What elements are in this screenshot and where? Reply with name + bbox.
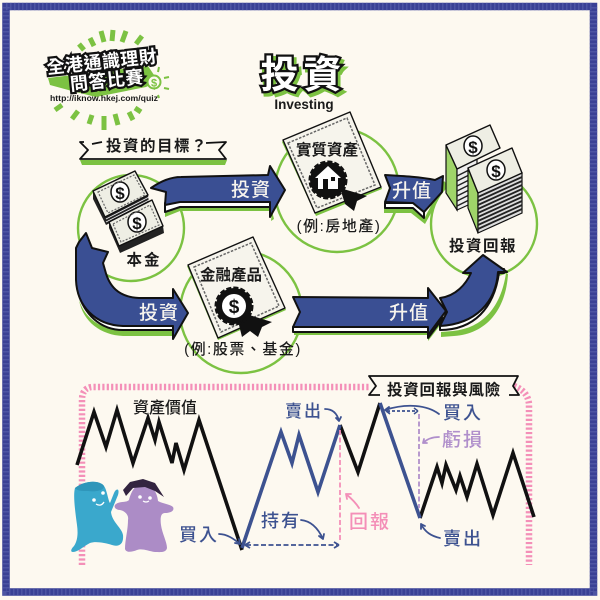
title: 投資 (263, 58, 349, 100)
stack front: $ (491, 162, 501, 181)
title: 投資 (260, 55, 347, 97)
label: real estate example: (例:房地產) (297, 218, 381, 235)
banner: investing goal (80, 136, 227, 165)
label: buy high (385, 403, 483, 423)
icon: principal money stacks (93, 171, 164, 253)
banner: investing goal: 投資的目標？ (106, 136, 208, 155)
arrow: return curve from principal: 投資 (139, 302, 179, 324)
arrow: invest to real assets (151, 166, 285, 221)
label: financial products: 金融產品 (200, 265, 262, 284)
icon: blue character (71, 482, 123, 552)
arrow: curve up to return (440, 255, 508, 337)
logo title lines (46, 46, 160, 97)
label: buy high: 買入 (443, 403, 483, 423)
label: loss (423, 429, 484, 451)
line chart: asset value (77, 403, 534, 550)
label: real assets: 實質資產 (296, 140, 358, 159)
logo url: http://iknow.hkej.com/quiz (50, 93, 158, 103)
icon: purple character (115, 479, 173, 552)
green circles (78, 128, 537, 373)
label: loss: 虧損 (442, 429, 484, 451)
arrow: return height (339, 430, 341, 542)
arrow: financial products appreciate: 升值 (389, 302, 429, 324)
label: hold (261, 511, 324, 539)
stack back: $ (468, 138, 478, 157)
banner: return and risk: 投資回報與風險 (387, 380, 501, 399)
label: sell: 賣出 (285, 402, 323, 421)
label: sell low (421, 524, 483, 549)
dollar coin: $ (151, 78, 157, 90)
label: asset value: 資產價值 (133, 398, 197, 417)
icon: house badge (310, 162, 367, 211)
subtitle: Investing (274, 97, 334, 112)
arrow: invest to real assets: 投資 (231, 179, 271, 201)
certificate: financial products (187, 237, 286, 340)
arrow: loss height (418, 414, 420, 508)
icon: return money stacks (446, 125, 522, 233)
label: principal: 本金 (126, 250, 162, 269)
pink dashed frame (82, 386, 529, 565)
panel: return and risk (77, 376, 534, 565)
label: buy (179, 525, 240, 545)
banner: return and risk (369, 376, 519, 399)
label: investment return: 投資回報 (449, 236, 517, 255)
arrow: loss span horizontal (386, 408, 418, 414)
money stack back: $ (115, 184, 125, 203)
label: stock and fund example: (例:股票、基金) (184, 340, 302, 358)
arrow: return curve from principal (76, 233, 188, 340)
label: buy: 買入 (179, 525, 219, 545)
logo title lines: 全港通識理財 (46, 46, 158, 78)
arrow: real assets appreciate: 升值 (392, 180, 432, 202)
sunburst rays (55, 30, 169, 130)
label: sell (285, 402, 341, 421)
arrow: holding period (245, 542, 339, 548)
label: sell low: 賣出 (443, 529, 483, 549)
label: return (346, 494, 391, 533)
money stack front: $ (132, 214, 142, 233)
arrow: real assets appreciate (384, 175, 447, 224)
logo title lines: 問答比賽 (69, 66, 145, 95)
logo: quiz badge (46, 30, 169, 130)
arrow: financial products appreciate (293, 288, 446, 341)
label: hold: 持有 (261, 511, 301, 531)
certificate: real assets (282, 112, 382, 216)
icon: dollar badge: $ (229, 297, 240, 318)
label: return: 回報 (349, 511, 391, 533)
